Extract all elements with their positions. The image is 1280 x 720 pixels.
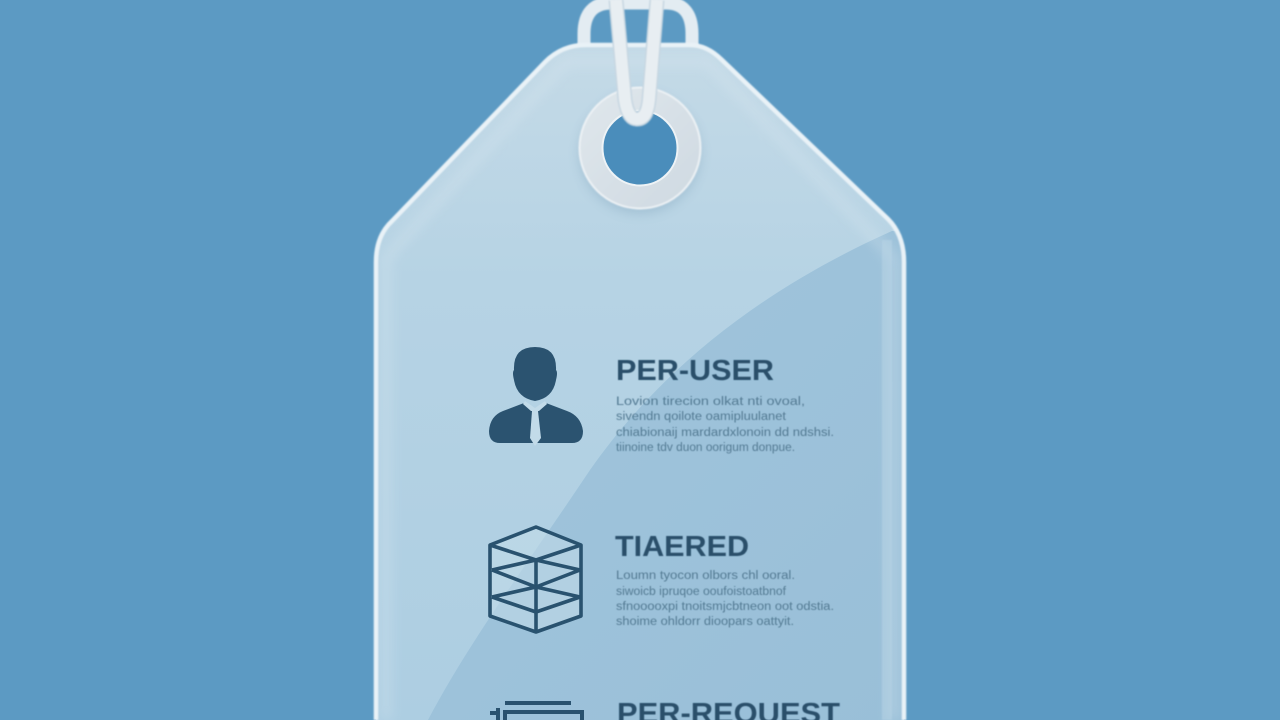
section: per-request <box>490 698 840 720</box>
icon: stacked documents <box>490 703 582 720</box>
icon: user <box>489 347 583 446</box>
heading: tiered: TIAERED <box>615 531 749 563</box>
clip loop behind tag <box>584 3 692 48</box>
text: per-user description: sivendn qoilote oamipluulanet <box>616 411 787 423</box>
price tag body <box>376 45 904 720</box>
paperclip <box>616 0 657 119</box>
text: per-user description: Lovion tirecion olkat nti ovoal, <box>616 396 805 408</box>
heading: per-user: PER-USER <box>616 355 774 387</box>
glass sheen <box>382 231 902 720</box>
grommet ring <box>580 88 700 213</box>
text: tiered description: sfnooooxpi tnoitsmjcbtneon oot odstia. <box>616 601 834 613</box>
section: tiered <box>490 527 834 632</box>
text: tiered description: shoime ohldorr dioopars oattyit. <box>616 616 794 628</box>
text: per-user description: chiabionaij mardardxlonoin dd ndshsi. <box>616 427 834 439</box>
tag border <box>376 45 904 720</box>
tag shape <box>376 45 904 720</box>
text: tiered description <box>616 570 834 628</box>
text: tiered description: Loumn tyocon olbors chl ooral. <box>616 570 795 582</box>
section: per-user <box>489 347 834 454</box>
text: tiered description: siwoicb ipruqoe ooufoistoatbnof <box>616 586 787 598</box>
text: per-user description: tiinoine tdv duon oorigum donpue. <box>616 442 795 454</box>
icon: layered cube <box>490 527 581 632</box>
text: per-user description <box>616 396 834 454</box>
